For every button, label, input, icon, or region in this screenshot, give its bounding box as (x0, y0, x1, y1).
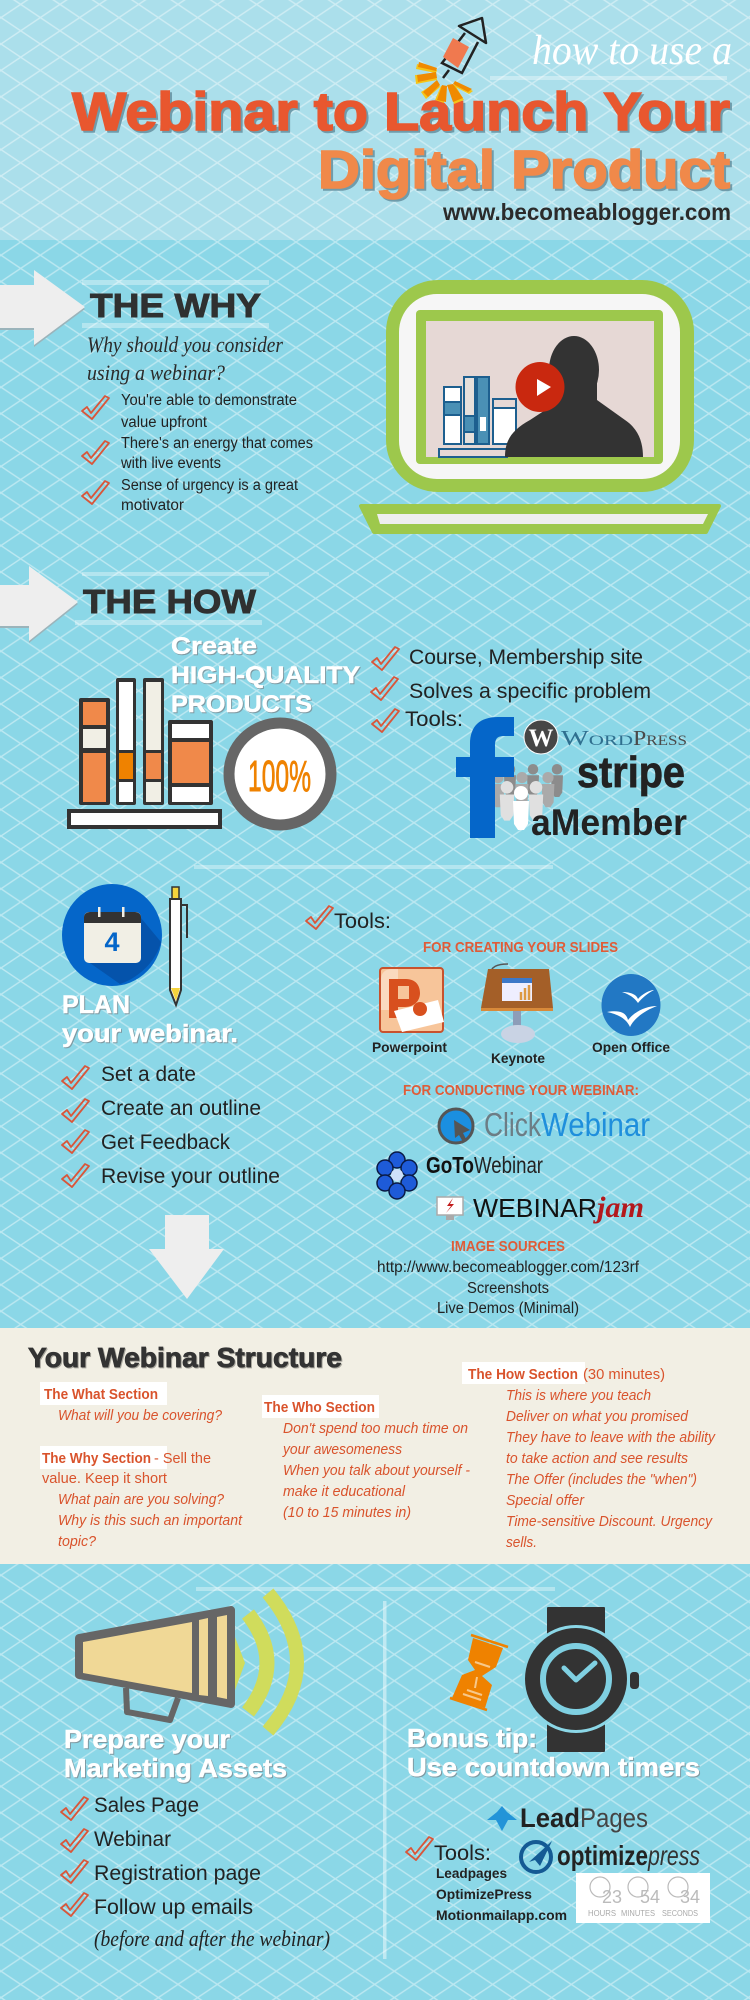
column: what and why: The Why Section (42, 1451, 151, 1467)
list: product points: Solves a specific problem (409, 680, 651, 703)
text: image sources list (377, 1259, 640, 1317)
logo: gotowebinar (377, 1152, 543, 1199)
header title (72, 28, 732, 225)
list: marketing assets: Registration page (94, 1861, 261, 1885)
list: timer tools (406, 1837, 567, 1923)
list: marketing assets: Follow up emails (94, 1895, 253, 1919)
heading: Webinar to Launch Your: Webinar to Launch Your (72, 82, 730, 142)
list: plan steps: Set a date (101, 1062, 196, 1086)
text: image sources list: http://www.becomeablogger.com/123rf (377, 1259, 640, 1276)
list: plan steps (62, 1062, 280, 1188)
heading: bonus tip: Use countdown timers (407, 1752, 700, 1782)
heading: plan your webinar: your webinar. (62, 1020, 238, 1048)
list: plan steps: Get Feedback (101, 1130, 230, 1154)
logo: webinarjam: jam (593, 1191, 644, 1224)
column: how: Special offer (506, 1493, 585, 1509)
logo: clickwebinar: Webinar (541, 1106, 650, 1143)
logo: wordpress: Word (561, 726, 633, 750)
icon: megaphone (79, 1593, 297, 1731)
label: Keynote (491, 1050, 545, 1066)
play button (516, 362, 564, 412)
column: who: When you talk about yourself - (283, 1463, 470, 1479)
heading: THE WHY: THE WHY (90, 287, 261, 324)
logo: gotowebinar: GoTo (426, 1152, 474, 1178)
column: who (262, 1395, 470, 1521)
column: who: make it educational (283, 1484, 406, 1500)
list: timer tools: Motionmailapp.com (436, 1907, 567, 1923)
icon: books (69, 678, 220, 827)
column: how: The How Section (468, 1367, 578, 1383)
logo: webinarjam: WEBINAR (473, 1193, 597, 1223)
logo: optimizepress: optimize (557, 1840, 648, 1871)
list: reasons (82, 392, 313, 514)
logo: optimizepress: press (647, 1840, 700, 1871)
label: tools: Tools: (334, 910, 391, 933)
column: how: to take action and see results (506, 1451, 688, 1467)
heading: creating slides: FOR CREATING YOUR SLIDES (423, 939, 618, 956)
heading: plan your webinar: PLAN (62, 991, 130, 1019)
countdown timer: HOURS (588, 1909, 616, 1918)
column: what and why: - Sell the (154, 1451, 211, 1467)
heading: conducting webinar: FOR CONDUCTING YOUR WEBINAR: (403, 1082, 639, 1099)
column: how: They have to leave with the ability (506, 1430, 716, 1446)
countdown timer: SECONDS (662, 1909, 698, 1918)
icon: pen (170, 887, 187, 1005)
heading: how to use a: how to use a (532, 28, 732, 74)
logo: wordpress: Press (633, 726, 687, 750)
column: who: (10 to 15 minutes in) (283, 1505, 411, 1521)
countdown timer: MINUTES (621, 1909, 655, 1918)
laptop illustration (361, 280, 719, 532)
icon: powerpoint (372, 968, 447, 1055)
panel: the why (82, 280, 313, 514)
column: how: This is where you teach (506, 1388, 651, 1404)
list: timer tools: OptimizePress (436, 1886, 532, 1902)
label: Powerpoint (372, 1039, 447, 1055)
arrow: why (0, 270, 85, 347)
arrow: how (0, 566, 78, 643)
column: what and why: What pain are you solving? (58, 1492, 225, 1508)
column: what and why (40, 1382, 243, 1550)
column: what and why: What will you be covering? (58, 1408, 223, 1424)
column: how: The Offer (includes the "when") (506, 1472, 697, 1488)
list: plan steps: Create an outline (101, 1096, 261, 1120)
column: who: Don't spend too much time on (283, 1421, 468, 1437)
silhouette (505, 336, 643, 457)
badge: 100%: 100% (248, 752, 311, 801)
column: how: Deliver on what you promised (506, 1409, 689, 1425)
panel: webinar tools (306, 906, 670, 1317)
list: product points (371, 646, 651, 732)
countdown timer: 54 (640, 1887, 660, 1907)
icon: hourglass (450, 1635, 508, 1710)
logo: people group (492, 764, 563, 830)
column: how: sells. (506, 1535, 537, 1551)
heading: plan your webinar (62, 991, 238, 1048)
subheading: high quality products: HIGH-QUALITY (171, 662, 360, 689)
icon: rocket (415, 18, 486, 104)
subheading: why consider: Why should you consider (87, 332, 283, 357)
subheading: high quality products: Create (171, 633, 257, 660)
subheading: high quality products (171, 633, 360, 718)
logo: webinarjam (437, 1191, 644, 1224)
list: reasons: There's an energy that comes (121, 435, 313, 452)
logo: gotowebinar: Webinar (474, 1152, 543, 1178)
list: product points: Course, Membership site (409, 646, 643, 669)
arrow: down (149, 1215, 224, 1299)
logo: amember: aMember (531, 802, 687, 843)
logo: clickwebinar (439, 1106, 650, 1143)
subheading: why consider: using a webinar? (87, 360, 225, 385)
column: how: Time-sensitive Discount. Urgency (506, 1514, 713, 1530)
heading: bonus tip (407, 1723, 700, 1782)
list: marketing assets (61, 1793, 330, 1951)
logo: wordpress: W (528, 725, 554, 752)
icon: calendar: 4 (104, 927, 120, 957)
logo: facebook (456, 717, 514, 838)
column: how: (30 minutes) (583, 1367, 665, 1383)
column: what and why: The What Section (44, 1387, 158, 1403)
heading: your webinar structure: Your Webinar Structure (28, 1342, 342, 1373)
list: reasons: with live events (120, 455, 221, 472)
column: who: The Who Section (264, 1400, 375, 1416)
label: Open Office (592, 1039, 670, 1055)
column: what and why: value. Keep it short (42, 1471, 167, 1487)
subheading: high quality products: PRODUCTS (171, 691, 312, 718)
heading: bonus tip: Bonus tip: (407, 1723, 537, 1753)
logo: leadpages (487, 1803, 648, 1833)
panel: webinar structure (0, 1328, 750, 1564)
heading: prepare marketing assets (64, 1724, 287, 1783)
laptop base (361, 506, 719, 532)
badge: 100% (229, 723, 331, 825)
icon: watch (522, 1607, 639, 1752)
list: reasons: You're able to demonstrate (121, 392, 297, 409)
logo: optimizepress (521, 1840, 700, 1872)
heading: prepare marketing assets: Prepare your (64, 1724, 230, 1754)
list: timer tools: Leadpages (436, 1865, 507, 1881)
column: what and why: Why is this such an important (58, 1513, 243, 1529)
panel: the how (75, 572, 360, 718)
book icons (439, 377, 516, 457)
website url: www.becomeablogger.com (442, 199, 731, 225)
list: timer tools: Tools: (434, 1842, 491, 1865)
text: image sources list: Screenshots (467, 1280, 549, 1297)
list: marketing assets: (before and after the webinar) (94, 1926, 330, 1951)
logo: leadpages: Lead (520, 1803, 580, 1833)
icon: open office (592, 974, 670, 1055)
column: who: your awesomeness (282, 1442, 402, 1458)
icon: calendar (62, 884, 162, 986)
heading: prepare marketing assets: Marketing Assets (64, 1753, 287, 1783)
list: marketing assets: Sales Page (94, 1793, 199, 1817)
countdown timer: 23 (602, 1887, 622, 1907)
text: image sources list: Live Demos (Minimal) (437, 1300, 579, 1317)
list: product points: Tools: (405, 708, 463, 731)
logo: clickwebinar: Click (484, 1106, 541, 1143)
list: reasons: motivator (121, 497, 184, 514)
list: plan steps: Revise your outline (101, 1164, 280, 1188)
logo: leadpages: Pages (580, 1803, 648, 1833)
column: what and why: topic? (58, 1534, 97, 1550)
column: how (462, 1362, 716, 1551)
icon: keynote (481, 964, 553, 1066)
countdown timer (576, 1873, 710, 1923)
list: marketing assets: Webinar (94, 1827, 171, 1851)
list: reasons: value upfront (121, 414, 208, 431)
list: reasons: Sense of urgency is a great (121, 477, 299, 494)
subheading: why consider (87, 332, 283, 385)
logo: wordpress (524, 720, 687, 754)
logo: stripe: stripe (577, 748, 685, 797)
heading: image sources: IMAGE SOURCES (451, 1238, 565, 1255)
heading: THE HOW: THE HOW (83, 583, 257, 620)
heading: Digital Product: Digital Product (318, 140, 730, 200)
countdown timer: 34 (680, 1887, 700, 1907)
